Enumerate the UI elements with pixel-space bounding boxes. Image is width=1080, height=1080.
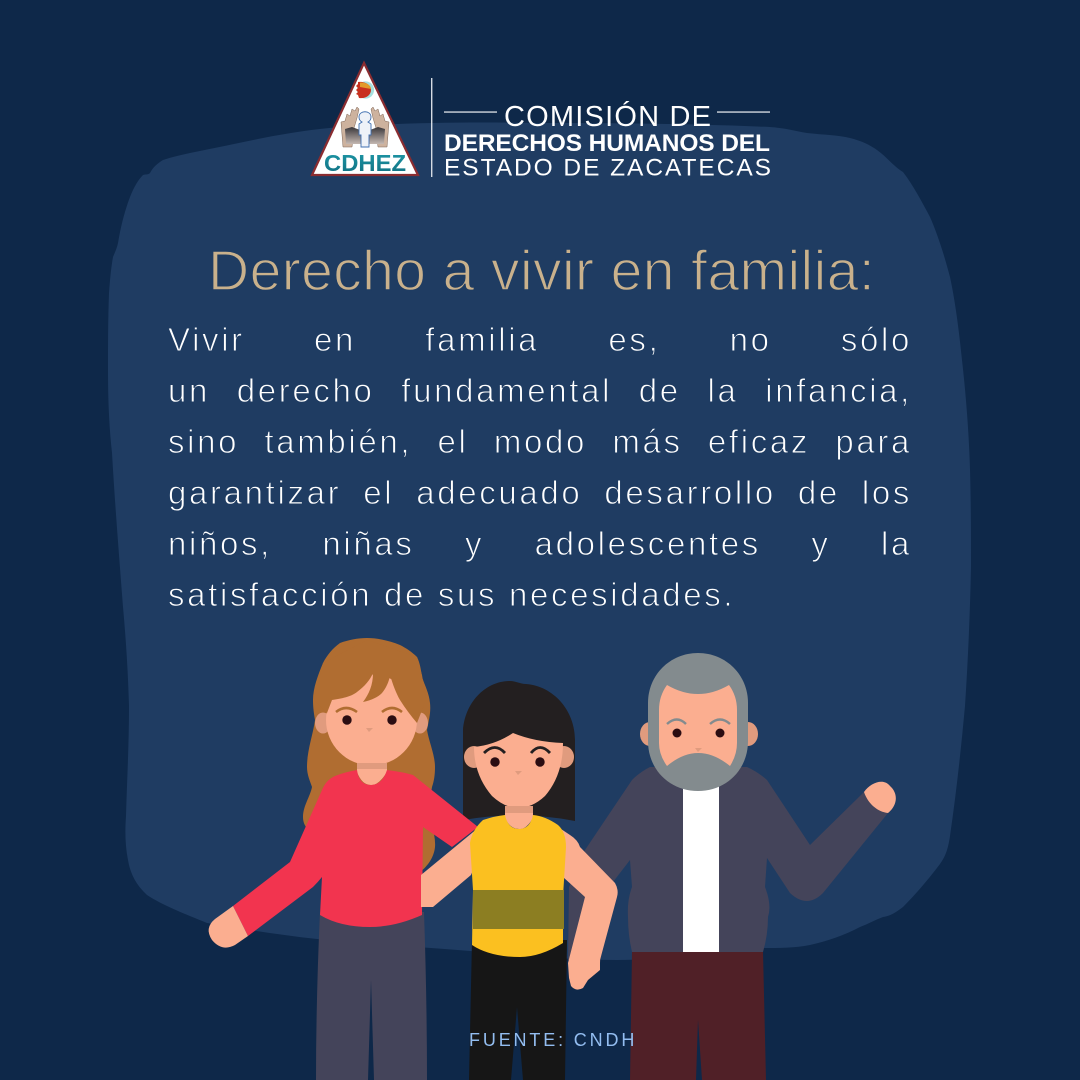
body text: sino también, el modo más eficaz para (168, 423, 912, 460)
source note: FUENTE: CNDH (469, 1030, 637, 1050)
brows (336, 708, 402, 712)
face (326, 674, 417, 766)
hand (209, 906, 248, 948)
ears (464, 746, 484, 768)
figure: grandfather (568, 653, 896, 1080)
hand (864, 782, 896, 813)
ears (315, 712, 331, 734)
logo wordmark: ESTADO DE ZACATECAS (444, 154, 771, 182)
shirt (683, 780, 719, 952)
pants (316, 912, 427, 1080)
body text: Vivir en familia es, no sólo (168, 321, 912, 358)
logo divider (431, 78, 432, 177)
body text (168, 321, 912, 613)
brows (667, 720, 730, 724)
eyes (672, 728, 682, 738)
eyes (490, 757, 500, 767)
brows (484, 748, 550, 753)
body text: garantizar el adecuado desarrollo de los (168, 474, 912, 511)
face (474, 733, 563, 808)
jacket (568, 767, 888, 963)
trousers (630, 952, 766, 1080)
logo wordmark: DERECHOS HUMANOS DEL (444, 130, 770, 157)
body text: un derecho fundamental de la infancia, (168, 372, 912, 409)
logo: CDHEZ triangle (312, 63, 418, 176)
back hair (303, 638, 435, 872)
face (659, 685, 737, 766)
nose (695, 748, 702, 752)
right arm (558, 827, 618, 990)
top stripe (473, 890, 564, 929)
icon: sun (356, 81, 374, 99)
ears (640, 722, 660, 746)
figure: girl hair (463, 681, 575, 821)
eyes (342, 715, 352, 725)
figure: mother (209, 638, 478, 1080)
nose (515, 771, 522, 775)
background blob panel (108, 122, 971, 960)
hair and beard (648, 653, 748, 791)
logo wordmark (444, 100, 771, 182)
left arm (421, 828, 485, 907)
nose (366, 728, 373, 732)
figure: girl (421, 733, 618, 1080)
title: Derecho a vivir en familia: (208, 239, 875, 303)
top (470, 815, 566, 957)
neck (357, 763, 387, 785)
logo initials: CDHEZ (324, 150, 406, 176)
pants (469, 940, 567, 1080)
body text: niños, niñas y adolescentes y la (168, 525, 912, 562)
sweater (233, 770, 478, 936)
neck (505, 806, 533, 829)
front hair (314, 640, 426, 723)
icon: hands and person (341, 107, 389, 147)
logo wordmark: COMISIÓN DE (504, 100, 711, 133)
body text: satisfacción de sus necesidades. (168, 576, 735, 613)
